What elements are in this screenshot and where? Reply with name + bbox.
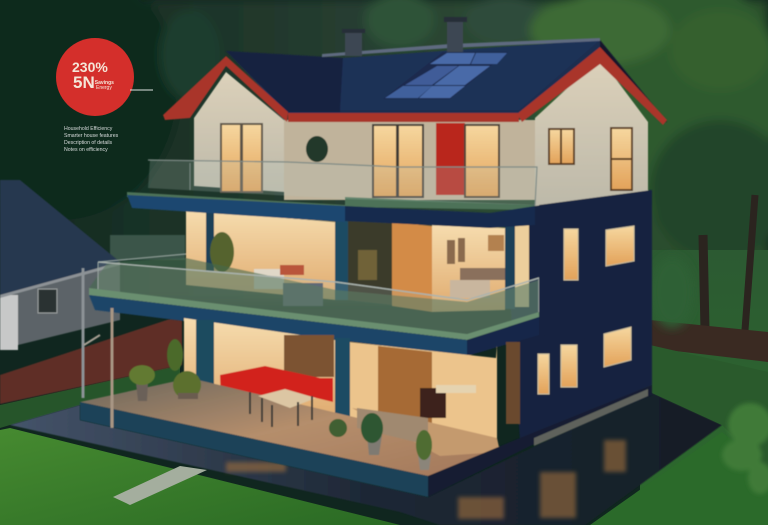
callout figures: 230% [72,59,108,75]
caption text [64,126,119,153]
ground floor rooms [184,318,520,440]
lawn right [590,432,768,525]
back fence right [650,320,768,362]
band under upper balcony [127,195,535,228]
solar panel [383,52,508,99]
wooden fence [0,315,182,404]
caption text: Household Efficiency [64,126,113,132]
navy side block [505,190,652,440]
lawn right middle [650,345,768,470]
middle balcony [89,254,539,356]
lamp posts [83,268,112,428]
navy upper patch [539,190,652,345]
distant lawn [110,235,185,260]
upper balcony [127,160,537,210]
stone slab [113,466,207,505]
right lawn background [640,250,768,525]
upper storey walls [194,58,648,206]
background: forest [0,0,768,300]
right bush [722,403,768,494]
wet pavement [10,392,722,525]
callout leader line [130,89,153,91]
neighbour house [0,180,120,350]
bush right of house [650,256,694,328]
red trim [163,47,667,125]
callout circle [56,38,134,116]
ground deck [80,378,652,497]
roof [226,38,667,122]
ground patio furniture [129,339,432,470]
callout second figure: Savings [95,80,114,86]
upper doors and windows [221,123,632,197]
tree trunks [703,195,755,330]
side windows [538,226,634,394]
caption text: Smarter house features [64,133,119,139]
caption text: Notes on efficiency [64,147,108,153]
callout second figure: 5N [73,73,95,92]
house [80,17,667,497]
middle floor rooms [186,210,529,312]
lawn left [0,428,400,525]
callout: red circle [56,38,134,116]
caption text: Description of details [64,140,113,146]
chimneys [342,17,467,56]
pavement reflections [226,440,626,519]
left lawn strip behind fence [0,365,180,428]
callout small label: Energy [96,85,112,91]
